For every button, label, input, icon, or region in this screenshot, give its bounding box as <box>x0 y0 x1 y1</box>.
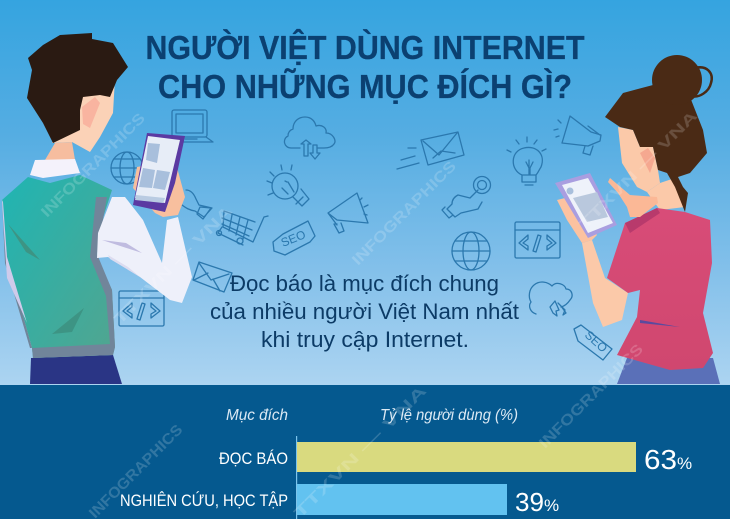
title: NGƯỜI VIỆT DÙNG INTERNET <box>146 29 584 66</box>
shirt arm <box>97 197 192 303</box>
watermarks: TTXVN — VNA <box>111 203 236 328</box>
watermarks <box>38 108 701 519</box>
icon: laptop <box>170 110 213 142</box>
watermarks: INFOGRAPHICS <box>349 158 460 269</box>
watermarks: TTXVN — VNA <box>576 108 701 233</box>
floating icons <box>111 110 612 360</box>
chart column headings: Tỷ lệ người dùng (%) <box>380 407 518 424</box>
icon: code window left <box>119 291 164 326</box>
illustration: man with phone <box>2 33 192 384</box>
title <box>146 29 584 105</box>
vest <box>2 175 115 358</box>
phone hand <box>557 198 597 243</box>
icon: SEO tag right: SEO <box>582 328 610 355</box>
chart panel <box>0 385 730 519</box>
illustration: woman with phone <box>555 55 720 384</box>
icon: globe left <box>111 152 143 184</box>
icon: SEO tag <box>273 221 315 255</box>
arm <box>582 240 628 327</box>
ear <box>82 97 100 128</box>
icon: globe right <box>452 232 490 270</box>
ear <box>640 148 655 173</box>
body text <box>210 271 520 352</box>
icon: cloud <box>284 117 335 159</box>
axis line <box>296 436 297 519</box>
bar row: nghiên cứu, học tập: % <box>544 496 559 515</box>
hair bun <box>652 55 702 105</box>
icon: SEO tag: SEO <box>279 227 308 250</box>
bar row: đọc báo: % <box>677 454 692 473</box>
bar row: nghiên cứu, học tập: NGHIÊN CỨU, HỌC TẬP <box>120 491 288 510</box>
icon: megaphone centre <box>328 193 368 233</box>
body text: khi truy cập Internet. <box>261 327 469 352</box>
face <box>618 127 660 192</box>
pointing hand <box>608 178 658 217</box>
body text: Đọc báo là mục đích chung <box>230 271 499 296</box>
chart column headings: Mục đích <box>226 407 288 424</box>
title: CHO NHỮNG MỤC ĐÍCH GÌ? <box>158 68 572 105</box>
icon: cloud right <box>529 282 572 316</box>
hair <box>605 85 707 212</box>
icon: megaphone right <box>554 116 601 155</box>
bar row: đọc báo <box>219 442 692 475</box>
watermarks: INFOGRAPHICS <box>38 110 149 221</box>
phone <box>555 173 617 238</box>
icon: code window right <box>515 222 560 258</box>
watermarks: INFOGRAPHICS <box>536 341 647 452</box>
neck <box>45 142 75 160</box>
trousers <box>617 358 720 384</box>
bar row: đọc báo: 63 <box>644 444 677 475</box>
bar row: nghiên cứu, học tập <box>120 484 559 517</box>
icon: light bulb left <box>267 165 309 206</box>
icon: SEO tag right <box>574 325 612 360</box>
icon: shopping cart <box>216 211 268 245</box>
icon: pointing hand left <box>182 190 212 219</box>
trousers <box>30 355 122 384</box>
icon: touch hand <box>442 176 490 218</box>
body text: của nhiều người Việt Nam nhất <box>210 299 520 324</box>
icon: light bulb right <box>507 137 546 185</box>
face <box>52 78 115 152</box>
chart column headings <box>226 407 518 424</box>
collar <box>30 159 80 178</box>
bar row: đọc báo: ĐỌC BÁO <box>219 449 288 468</box>
icon: envelope top <box>397 132 464 169</box>
shirt <box>607 208 713 370</box>
hand <box>133 160 185 217</box>
icon: envelope left <box>193 262 232 292</box>
hair <box>27 33 128 143</box>
phone <box>133 133 185 212</box>
vest edge shading <box>2 197 115 358</box>
bar row: nghiên cứu, học tập: 39 <box>515 487 544 517</box>
neck <box>647 177 685 210</box>
sky background <box>0 0 730 385</box>
